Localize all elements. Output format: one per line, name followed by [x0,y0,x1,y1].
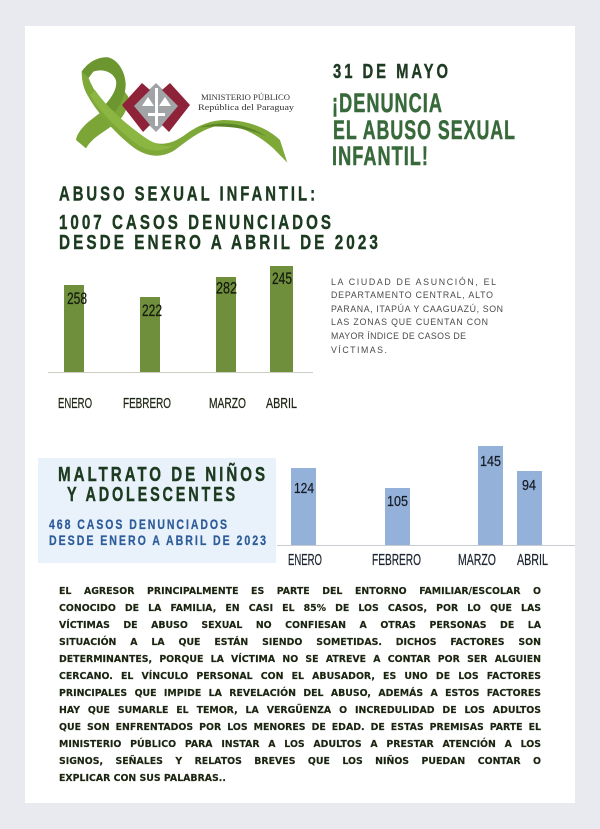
text block: explicación: EL AGRESOR PRINCIPALMENTE ES PARTE DEL ENTORNO FAMILIAR/ESCOLAR O [59,586,541,597]
text block: zonas [331,277,503,355]
text block: zonas: MAYOR ÍNDICE DE CASOS DE [331,331,466,341]
text block: explicación: DETERMINANTES, PORQUE LA VÍCTIMA NO SE ATREVE A CONTAR POR SER ALGUIEN [59,654,541,665]
bar chart: maltrato: 145 [480,453,501,470]
bar chart: abuso sexual: 245 [272,270,292,288]
text block: zonas: LAS ZONAS QUE CUENTAN CON [331,317,488,327]
heading: abuso sexual infantil: DESDE ENERO A ABRIL DE 2023 [59,232,381,254]
bar chart: abuso sexual: MARZO [209,395,246,412]
bar chart: abuso sexual: 282 [216,280,237,298]
bar chart: maltrato: 105 [387,493,408,510]
bar chart: abuso sexual: 222 [142,302,162,320]
text block: zonas: LA CIUDAD DE ASUNCIÓN, EL [331,277,496,287]
bar chart: abuso sexual: ENERO [58,395,92,412]
text block: explicación: QUE SON ENFRENTADOS POR LOS MENORES DE EDAD. DE ESTAS PREMISAS PARTE EL [59,722,541,733]
bar chart: maltrato: 124 [294,480,314,497]
bar chart: maltrato: 94 [522,477,536,494]
bar chart: abuso sexual: 258 [67,290,87,308]
bar chart: maltrato: MARZO [458,552,496,569]
campaign title [332,88,516,171]
text block: explicación [59,586,541,784]
heading: maltrato: Y ADOLESCENTES [67,483,238,506]
heading: abuso sexual infantil: ABUSO SEXUAL INFANTIL: [59,184,318,206]
heading: maltrato [58,463,268,506]
date heading: 31 DE MAYO [333,61,451,83]
text block: explicación: EXPLICAR CON SUS PALABRAS.. [59,773,226,784]
text block: explicación: CERCANO. EL VÍNCULO PERSONAL CON EL ABUSADOR, ES UNO DE LOS FACTORES [59,671,541,682]
logo text [198,92,295,112]
subheading: casos maltrato: DESDE ENERO A ABRIL DE 2023 [49,533,268,548]
text block: explicación: CONOCIDO DE LA FAMILIA, EN CASI EL 85% DE LOS CASOS, POR LO QUE LAS [59,603,541,614]
bar chart: maltrato: ABRIL [517,552,548,569]
text block: explicación: SITUACIÓN A LA QUE ESTÁN SIENDO SOMETIDAS. DICHOS FACTORES SON [59,637,541,648]
campaign title: INFANTIL! [332,141,429,171]
bar chart: abuso sexual [48,266,313,412]
icon: Ministerio Público logo [122,83,190,132]
text block: zonas: VÍCTIMAS. [331,345,387,355]
bar chart: abuso sexual: ABRIL [266,395,297,412]
subheading: casos maltrato [49,517,268,548]
logo text: República del Paraguay [198,102,295,112]
text block: explicación: SIGNOS, SEÑALES Y RELATOS BREVES QUE LOS NIÑOS PUEDAN CONTAR O [59,756,541,767]
text block: zonas: DEPARTAMENTO CENTRAL, ALTO [331,290,493,300]
heading: abuso sexual infantil: 1007 CASOS DENUNCIADOS [59,212,334,234]
campaign title: EL ABUSO SEXUAL [333,115,516,145]
heading: maltrato: MALTRATO DE NIÑOS [58,463,268,486]
bar chart: abuso sexual: FEBRERO [123,395,171,412]
campaign title: ¡DENUNCIA [332,88,443,118]
text block: explicación: HAY QUE SUMARLE EL TEMOR, LA VERGÜENZA O INCREDULIDAD DE LOS ADULTOS [59,705,541,716]
logo text: MINISTERIO PÚBLICO [201,92,290,102]
text block: zonas: PARANA, ITAPÚA Y CAAGUAZÚ, SON [331,304,503,314]
bar chart: maltrato: ENERO [288,552,322,569]
heading: abuso sexual infantil [59,184,381,254]
icon: green ribbon [76,57,287,163]
panel: maltrato [38,458,276,563]
text block: explicación: PRINCIPALES QUE IMPIDE LA REVELACIÓN DEL ABUSO, ADEMÁS A ESTOS FACTORES [59,688,541,699]
text block: explicación: VÍCTIMAS DE ABUSO SEXUAL NO CONFIESAN A OTRAS PERSONAS DE LA [59,620,541,631]
bar chart: maltrato [277,446,575,569]
text block: explicación: MINISTERIO PÚBLICO PARA INSTAR A LOS ADULTOS A PRESTAR ATENCIÓN A LOS [59,739,541,750]
bar chart: maltrato: FEBRERO [372,552,421,569]
subheading: casos maltrato: 468 CASOS DENUNCIADOS [49,517,229,532]
